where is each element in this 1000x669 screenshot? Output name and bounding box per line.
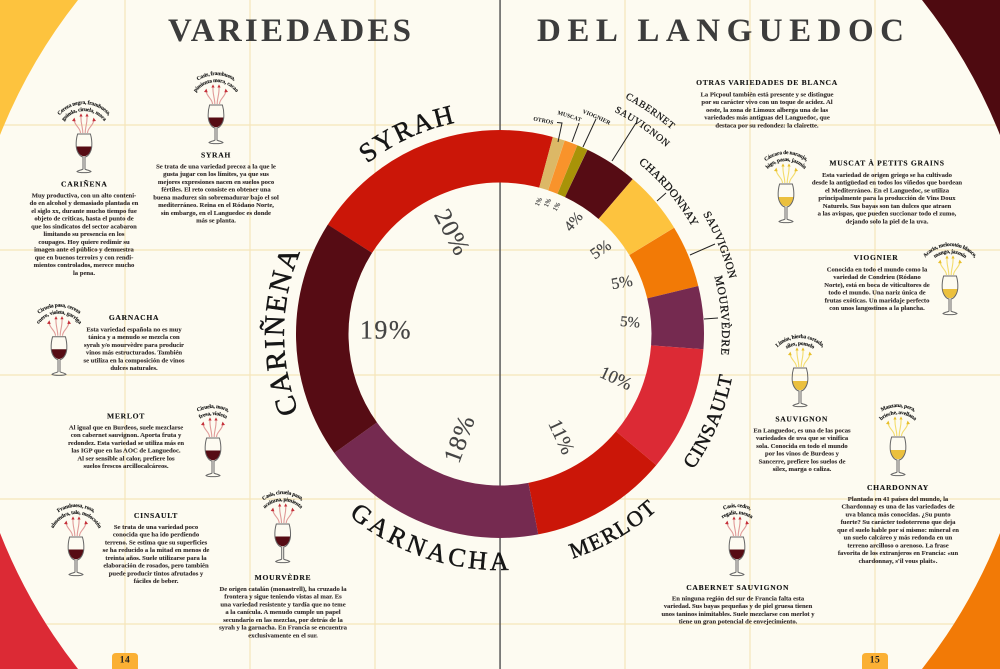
body: Sancerre, prefiere los suelos de [759,458,845,465]
body: mejores expresiones nacen en suelos poco [158,179,275,186]
body: fuerte? Su carácter todoterreno que deja [841,519,956,526]
5% sauvignon: 5% [610,273,634,293]
body: sílex, marga o caliza. [773,466,832,473]
donut chart [249,83,751,585]
body: dulces naturales. [110,365,158,372]
body: tiene un gran potencial de envejecimiento. [679,619,798,626]
icon: glass Syrah: pimienta mora, cacao [194,79,238,93]
icon: glass Viognier: Acacia, melocotón blanco, [924,242,976,258]
icon: glass Cabernet Sauvignon [721,503,752,576]
body: se utiliza en la composición de vinos [84,357,185,364]
icon: glass Mourvèdre: aceituna, pimienta [263,498,302,509]
page number 15 [862,653,888,669]
heading: SYRAH [201,150,231,160]
body: la pena. [73,270,95,277]
label: Merlot: MERLOT [568,499,655,559]
body: favorita de los extranjeros en Francia: «un [838,550,958,557]
body: Esta variedad de origen griego se ha cultivado [822,172,953,179]
body: oeste, la zona de Limoux alberga una de las [706,107,828,114]
body: imagen ante el público y demuestra [34,247,135,254]
body: De origen catalán (monastrell), ha cruzado la [219,586,347,593]
body: Muy productiva, con un alto conteni- [32,192,136,200]
body: fáciles de beber. [134,578,179,585]
icon: glass Cabernet Sauvignon: Casis, cedro, [723,503,750,510]
body: con unos langostinos a la plancha. [829,305,925,312]
icon: glass Cinsault: almendra, talo, melocotón [51,510,101,528]
body: variedades de uva que se vinifica [756,435,849,442]
center fold line [499,0,501,669]
panel: Sauvignon [753,334,851,473]
body: unos taninos inimitables. Suele mezclarse con merlot y [661,611,815,618]
icon: glass Mourvèdre [262,490,302,564]
icon: glass Sauvignon [775,334,823,408]
title right: DEL LANGUEDOC [537,13,904,49]
body: fértiles. El reto consiste en obtener una [161,187,271,194]
body: vinos más estructurados. También [86,350,182,357]
heading: CHARDONNAY [867,483,929,492]
body: Norte), está en boca de viticultores de [824,282,930,289]
icon: glass Chardonnay: Manzana, pera, [880,404,914,412]
body: syrah y la garnacha. En Francia se encuentra [219,625,348,632]
panel: Muscat [764,150,962,225]
body: exclusivamente en el sur. [248,632,318,639]
body: principalmente para la producción de Vins Doux [818,195,956,202]
panel: Syrah [153,71,279,225]
panel: Garnacha [37,304,185,376]
label: Chardonnay: CHARDONNAY [640,158,699,225]
body: mediterráneo. Reina en el Ródano Norte, [158,202,274,209]
body: sola. Conocida en todo el mundo [756,443,848,450]
heading: MERLOT [107,412,145,421]
5% chardonnay: 5% [587,237,615,263]
icon: glass Viognier: mango, jazmín [934,249,966,258]
leader lines [557,119,718,319]
body: sin embargo, en el Languedoc es donde [161,210,271,217]
body: Chardonnay es una de las variedades de [841,504,955,511]
percentages [360,196,641,467]
body: frontera y sigue teniendo vistas al mar. Es [224,594,342,601]
body: destaca por su redondez: la clairette. [715,122,819,129]
icon: glass Chardonnay [878,404,916,476]
body: Esta variedad española no es muy [86,326,182,334]
body: uva blanca más conocidas. ¿Su punto [845,511,951,518]
body: elaboración de rosados, pero también [103,563,209,570]
20%: 20% [428,205,475,261]
body: se ha reducido a la mitad en menos de [103,547,209,554]
body: redondez. Esta variedad se utiliza más en [68,440,184,447]
icon: glass Cabernet Sauvignon: regaliz, menta [721,510,752,519]
body: un suelo calcáreo y más redonda en un [844,535,953,542]
body: todo el mundo. Una nariz única de [828,290,926,297]
body: que los sindicatos del sector acabaron [31,223,137,230]
body: Al igual que en Burdeos, suele mezclarse [69,424,183,432]
body: Naturels. Sus bayas son tan dulces que atraen [823,203,952,210]
corner: yellow arc [0,0,78,135]
body: La Picpoul también está presente y se distingue [700,92,834,98]
icon: glass Muscat: higo, pasas, jazmín [765,158,806,170]
icon: glass Syrah [194,71,238,144]
body: En ninguna región del sur de Francia falta esta [672,596,805,602]
body: treinta años. Suele utilizarse para la [105,555,207,562]
body: syrah y/o mourvèdre para producir [84,342,184,349]
body: suelos frescos arcillocalcáreos. [84,463,169,470]
body: una variedad resistente y tardía que no teme [220,601,346,608]
body: conocida que ha ido perdiendo [113,532,200,539]
icon: glass Muscat [764,150,807,224]
icon: glass Mourvèdre: Casis, ciruela pasa, [262,490,302,501]
icon: glass Sauvignon: Limón, hierba cortada, [775,334,823,348]
heading: CARIÑENA [61,180,108,189]
panel: Merlot [68,404,228,478]
icon: glass Merlot [197,404,228,478]
label: Syrah: SYRAH [360,105,454,162]
panel: Cabernet Sauvignon [661,503,815,626]
body: buena madurez sin sobremadurar bajo el sol [153,194,279,201]
label: Otros: OTROS [534,117,554,124]
icon: glass Garnacha: cuero, violeta, garriga [37,310,81,324]
body: Se trata de una variedad precoz a la que le [156,164,276,170]
body: terreno. Se estima que su superficies [105,539,208,546]
panel: Cariñena [30,100,139,277]
10%: 10% [597,362,635,394]
body: a las avispas, que pueden succionar todo el zumo, [818,211,957,218]
body: Se trata de una variedad poco [114,524,199,531]
body: coupages. Hoy quiere redimir su [38,239,130,246]
body: a la canícula. A menudo cumple un papel [225,609,341,616]
corner: red arc [0,533,78,669]
body: Al ser sensible al calor, prefiere los [77,455,175,462]
heading: MOURVÈDRE [255,572,311,582]
body: terreno arcilloso o arenoso. La frase [847,542,949,549]
body: limitando su presencia en los [43,231,125,238]
body: el Mediterráneo. En el Languedoc, se utiliza [825,187,950,194]
body: En Languedoc, es una de las pocas [753,428,851,434]
11%: 11% [543,416,579,458]
icon: glass Cinsault: Frambuesa, rosa, [56,504,94,513]
icon: glass Cariñena: guinda, ciruela, mora [62,107,106,122]
body: secundario en las mezclas, por detrás de la [223,617,343,624]
label: Muscat: MUSCAT [557,110,582,122]
icon: glass Sauvignon: sílex, pomelo [786,342,814,349]
heading: VIOGNIER [854,253,898,262]
heading: MUSCAT À PETITS GRAINS [829,158,945,168]
icon: glass Chardonnay: brioche, avellana [878,411,916,421]
panel: Otras variedades [696,78,838,129]
body: más se planta. [196,218,236,225]
panel: Chardonnay [837,404,959,565]
label: Cinsault: CINSAULT [684,374,732,467]
body: tánica y a menudo se mezcla con [88,334,180,341]
body: por su carácter vivo con un toque de acidez. Al [701,99,833,106]
body: Plantada en 41 países del mundo, la [848,496,949,503]
label: Sauvignon: SAUVIGNON [704,211,737,278]
1% viognier: 1% [552,201,562,213]
panel: Cinsault [51,504,210,585]
1% otros: 1% [534,196,544,207]
body: desde la antigüedad en todos los viñedos que bordean [812,180,962,187]
body: frutas exóticas. Un maridaje perfecto [825,297,930,304]
heading: OTRAS VARIEDADES DE BLANCA [696,78,838,87]
4%: 4% [561,209,587,235]
icon: glass Cinsault [51,504,101,576]
icon: glass Muscat: Cáscara de naranja, [764,150,807,162]
body: mientos controlados, merece mucho [34,262,135,269]
page number 14 [112,653,138,669]
label: Cabernet: CABERNET [626,94,676,128]
heading: CABERNET SAUVIGNON [686,583,789,592]
icon: glass Merlot: Ciruela, mora, [197,404,228,412]
body: objeto de críticas, hasta el punto de [34,216,134,223]
5% mourvèdre: 5% [619,314,641,332]
body: las IGP que en las AOC de Languedoc. [71,448,181,455]
1% muscat: 1% [543,197,553,208]
heading: SAUVIGNON [775,415,828,424]
icon: glass Viognier [924,242,976,316]
body: puede producir tintos afrutados y [109,570,204,577]
body: por los vinos de Burdeos y [765,451,840,458]
panel: Viognier [824,242,976,316]
body: variedad de Condrieu (Ródano [833,274,921,281]
page number 15: 15 [870,656,880,666]
heading: GARNACHA [109,313,159,322]
body: dejando solo la piel de la uva. [846,218,929,225]
title left: VARIEDADES [168,13,411,49]
icon: glass Cariñena: Cereza negra, frambuesa, [58,100,110,116]
corner: dark red arc [922,0,1000,135]
18%: 18% [439,411,481,467]
label: Sauvignon (cabernet): SAUVIGNON [615,106,670,147]
label: Garnacha: GARNACHA [352,505,509,570]
page number 14: 14 [120,656,130,666]
panel: Mourvèdre [219,490,348,639]
body: variedades más antiguas del Languedoc, que [704,115,830,122]
icon: glass Garnacha [37,304,81,376]
label: Cariñena: CARIÑENA [260,252,300,415]
corner: orange arc [922,533,1000,669]
body: chardonnay, s'il vous plait». [859,558,938,565]
heading: CINSAULT [134,511,178,520]
label: Mourvèdre: MOURVÈDRE [714,275,732,355]
body: que el suelo hable por sí mismo: mineral en [837,527,959,534]
body: do en alcohol y demasiado plantada en [30,200,139,207]
body: con cabernet sauvignon. Aporta fruta y [71,432,182,439]
donut labels [260,94,782,570]
19%: 19% [360,316,412,344]
icon: glass Cariñena [58,100,110,174]
body: el siglo xx, durante mucho tiempo fue [31,208,137,215]
icon: glass Merlot: fresa, violeta [198,411,227,419]
body: Conocida en todo el mundo como la [827,266,928,274]
body: que en buenos terroirs y con rendi- [35,254,133,261]
label: Viognier: VIOGNIER [584,109,610,125]
icon: glass Garnacha: Ciruela pasa, cereza [38,304,80,314]
body: variedad. Sus bayas pequeñas y de piel gruesa tienen [664,603,813,610]
icon: glass Syrah: Casis, frambuesa, [196,71,234,81]
body: gusta jugar con los límites, ya que sus [163,171,269,178]
